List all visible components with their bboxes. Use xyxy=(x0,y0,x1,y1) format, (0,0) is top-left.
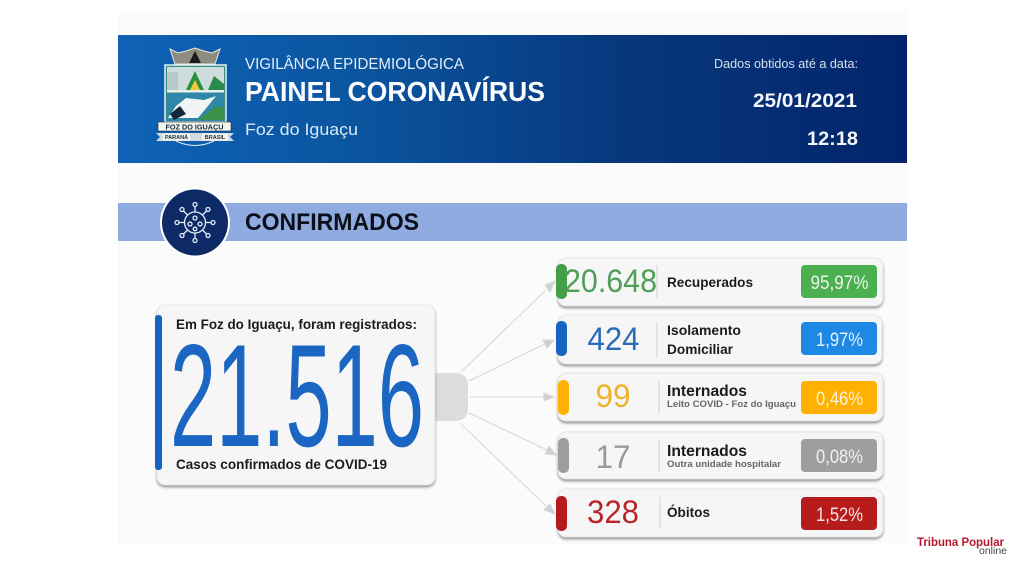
date label: Dados obtidos até a data: xyxy=(714,57,858,71)
date value: 25/01/2021 xyxy=(753,90,857,112)
total number: 21.516 xyxy=(170,314,424,477)
card: recuperados: 20.648 xyxy=(564,263,657,299)
crest state ribbon xyxy=(156,133,234,146)
card: obitos: 1,52% xyxy=(816,505,863,526)
header banner xyxy=(118,35,907,163)
card: internados leito covid: 99 xyxy=(596,378,630,414)
arrows xyxy=(460,281,556,514)
connector hub xyxy=(435,373,468,421)
watermark: online xyxy=(979,546,1007,557)
card: internados leito covid: 0,46% xyxy=(816,389,863,410)
card: isolamento domiciliar: 424 xyxy=(588,321,640,357)
card: obitos: Óbitos xyxy=(667,505,710,520)
card: isolamento domiciliar xyxy=(556,315,882,364)
card: obitos: 328 xyxy=(587,494,639,530)
header eyebrow: VIGILÂNCIA EPIDEMIOLÓGICA xyxy=(245,56,465,73)
card: internados leito covid: Leito COVID - Foz do Iguaçu xyxy=(667,399,796,410)
total intro: Em Foz do Iguaçu, foram registrados: xyxy=(176,317,417,332)
card: internados outra unidade xyxy=(558,432,883,479)
watermark xyxy=(917,535,1007,557)
header title: PAINEL CORONAVÍRUS xyxy=(245,76,545,107)
time value: 12:18 xyxy=(807,128,858,150)
total caption: Casos confirmados de COVID-19 xyxy=(176,457,387,472)
panel: total cases xyxy=(155,305,435,485)
card: internados outra unidade: Outra unidade hospitalar xyxy=(667,459,781,470)
icon: municipal crest xyxy=(156,48,234,146)
card: internados outra unidade: 17 xyxy=(596,439,630,475)
section heading: CONFIRMADOS xyxy=(245,209,419,236)
card: internados leito covid xyxy=(558,373,883,421)
section heading bar xyxy=(118,188,907,258)
card: internados outra unidade: Internados xyxy=(667,443,747,460)
card: internados outra unidade: 0,08% xyxy=(816,447,863,468)
card: recuperados xyxy=(556,258,883,306)
icon: virus xyxy=(160,188,230,258)
watermark: Tribuna Popular xyxy=(917,535,1004,549)
crest name ribbon: FOZ DO IGUAÇU xyxy=(166,124,224,132)
card: isolamento domiciliar: Domiciliar xyxy=(667,342,734,357)
card: recuperados: 95,97% xyxy=(810,273,869,294)
card: internados leito covid: Internados xyxy=(667,383,747,400)
crest state ribbon: PARANÁ xyxy=(165,134,188,141)
card: isolamento domiciliar: 1,97% xyxy=(816,330,863,351)
card: isolamento domiciliar: Isolamento xyxy=(667,323,741,338)
header city: Foz do Iguaçu xyxy=(245,120,358,139)
crest state ribbon: BRASIL xyxy=(205,135,226,141)
card: recuperados: Recuperados xyxy=(667,275,753,290)
card: obitos xyxy=(556,489,883,537)
accent bar xyxy=(155,315,162,470)
